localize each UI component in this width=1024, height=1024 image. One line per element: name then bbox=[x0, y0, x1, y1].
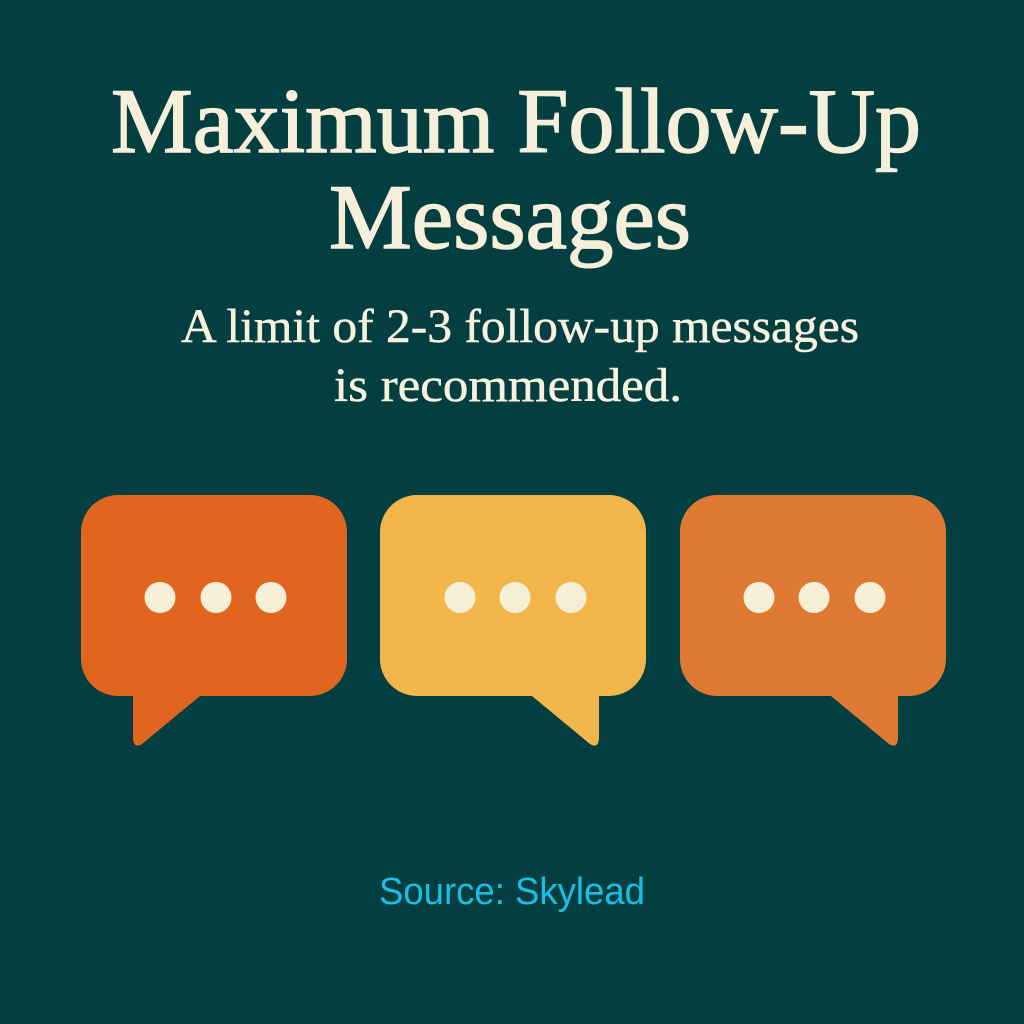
source: Source: Skylead bbox=[379, 871, 645, 913]
title: Messages bbox=[329, 166, 691, 268]
subtitle: is recommended. bbox=[334, 359, 682, 412]
subtitle: A limit of 2-3 follow-up messages bbox=[181, 300, 859, 353]
speech bubble: medium orange bbox=[680, 495, 946, 746]
speech bubble: yellow bbox=[380, 495, 646, 746]
subtitle bbox=[181, 300, 859, 412]
title bbox=[111, 70, 921, 268]
speech bubble: dark orange bbox=[81, 495, 347, 746]
title: Maximum Follow-Up bbox=[111, 70, 921, 172]
